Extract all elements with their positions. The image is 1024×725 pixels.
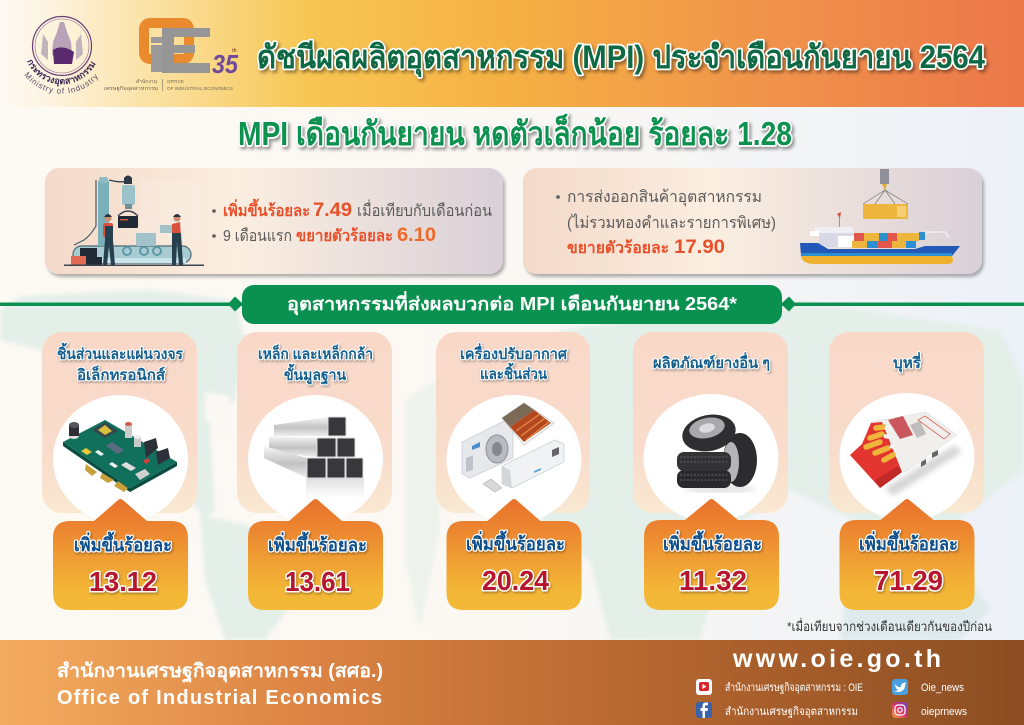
- text: bullet lines: 7.49: [313, 200, 352, 221]
- text: bullet lines: 9 เดือนแรก: [223, 227, 292, 245]
- heading: บุหรี่: [893, 352, 922, 373]
- header band: [0, 0, 1024, 107]
- icon: factory conveyor: [64, 176, 204, 266]
- logo: Ministry of Industry emblem: Ministry of Industry: [24, 72, 98, 94]
- logo: OIE 35th: เศรษฐกิจอุตสาหกรรม: [104, 85, 158, 92]
- text: twitter handle: Oie_news: [921, 682, 964, 694]
- heading: ผลิตภัณฑ์ยางอื่น ๆ: [653, 352, 770, 372]
- logo: OIE 35th: [104, 23, 238, 92]
- heading: ชิ้นส่วนและแผ่นวงจร: [57, 342, 184, 363]
- heading: ขั้นมูลฐาน: [284, 363, 347, 385]
- world map background: [0, 290, 1024, 640]
- panel: production index: [45, 168, 503, 274]
- badge: เพิ่มขึ้นร้อยละ: [663, 530, 762, 554]
- badge: 13.61: [285, 566, 350, 597]
- badge: [248, 499, 383, 610]
- text: bullet lines: เมื่อเทียบกับเดือนก่อน: [357, 199, 492, 220]
- badge: เพิ่มขึ้นร้อยละ: [268, 531, 367, 555]
- text: exports bullet: [556, 188, 776, 258]
- section line: [0, 302, 1024, 306]
- text: bullet lines: ขยายตัวร้อยละ: [296, 227, 393, 245]
- badge: 20.24: [482, 565, 549, 596]
- logo: OIE 35th: th: [232, 48, 237, 54]
- text: exports bullet: (ไม่รวมทองคำและรายการพิเศษ): [567, 213, 776, 232]
- logo: Ministry of Industry emblem: กระทรวงอุตสาหกรรม: [27, 60, 96, 87]
- badge: [53, 499, 188, 610]
- icon: instagram: [892, 702, 908, 718]
- logo: OIE 35th: สำนักงาน: [136, 79, 158, 85]
- heading: [258, 344, 373, 385]
- section heading pill: อุตสาหกรรมที่ส่งผลบวกต่อ MPI เดือนกันยายน 2564*: [287, 291, 737, 316]
- text: exports bullet: ขยายตัวร้อยละ: [567, 239, 669, 257]
- text: bullet lines: 6.10: [397, 225, 436, 246]
- badge: 11.32: [679, 565, 747, 596]
- footnote: *เมื่อเทียบจากช่วงเดือนเดียวกันของปีก่อน: [787, 618, 992, 634]
- logo: OIE 35th: OF INDUSTRIAL ECONOMICS: [167, 86, 233, 91]
- logo: OIE 35th: OFFICE: [167, 79, 184, 84]
- subtitle: MPI เดือนกันยายน หดตัวเล็กน้อย ร้อยละ 1.28: [238, 113, 792, 152]
- text: bullet lines: เพิ่มขึ้นร้อยละ: [223, 198, 310, 220]
- icon: cargo ship: [800, 169, 960, 264]
- section heading pill: [242, 285, 782, 324]
- badge: เพิ่มขึ้นร้อยละ: [74, 531, 172, 555]
- card: tobacco: [829, 332, 984, 610]
- text: instagram handle: oieprnews: [921, 706, 967, 718]
- icon: twitter: [892, 679, 908, 695]
- panel: exports: [523, 168, 982, 274]
- icon: circuit board: [63, 420, 177, 492]
- badge: เพิ่มขึ้นร้อยละ: [859, 530, 958, 554]
- icon: stacked tires: [677, 410, 757, 492]
- badge: [644, 499, 779, 610]
- icon: facebook: [696, 702, 712, 718]
- text: exports bullet: การส่งออกสินค้าอุตสาหกรรม: [567, 188, 762, 207]
- icon: air conditioner set: [462, 403, 564, 492]
- heading: เหล็ก และเหล็กกล้า: [258, 344, 373, 363]
- card: rubber products: [633, 332, 788, 610]
- badge: [446, 499, 582, 610]
- logo: Ministry of Industry emblem: [24, 16, 98, 94]
- logo: OIE 35th: 35: [212, 49, 238, 79]
- icon: cigarette pack: [850, 412, 962, 496]
- heading: อิเล็กทรอนิกส์: [77, 365, 166, 384]
- badge: เพิ่มขึ้นร้อยละ: [466, 530, 565, 554]
- text: youtube channel: สำนักงานเศรษฐกิจอุตสาหกรรม : OIE: [725, 682, 863, 694]
- card: air conditioners: [436, 332, 590, 610]
- text: exports bullet: 17.90: [674, 237, 725, 258]
- footer organisation name: สำนักงานเศรษฐกิจอุตสาหกรรม (สศอ.): [57, 661, 383, 684]
- footer band: [0, 640, 1024, 725]
- card: electronics: [42, 332, 197, 610]
- section diamonds: [228, 296, 796, 312]
- footer organisation name: [57, 661, 383, 709]
- badge: 13.12: [89, 566, 157, 597]
- heading: เครื่องปรับอากาศ: [460, 343, 567, 363]
- text: bullet lines: [212, 198, 492, 246]
- heading: และชิ้นส่วน: [480, 362, 548, 383]
- text: facebook page: สำนักงานเศรษฐกิจอุตสาหกรรม: [725, 706, 858, 718]
- icon: youtube: [696, 679, 712, 695]
- badge: [840, 499, 974, 610]
- badge: 71.29: [874, 565, 943, 596]
- heading: [57, 342, 184, 384]
- footer organisation name: Office of Industrial Economics: [57, 687, 382, 709]
- card: steel: [237, 332, 392, 610]
- footer website: www.oie.go.th: [732, 645, 941, 673]
- heading: [460, 343, 567, 383]
- icon: steel tubes: [264, 417, 364, 498]
